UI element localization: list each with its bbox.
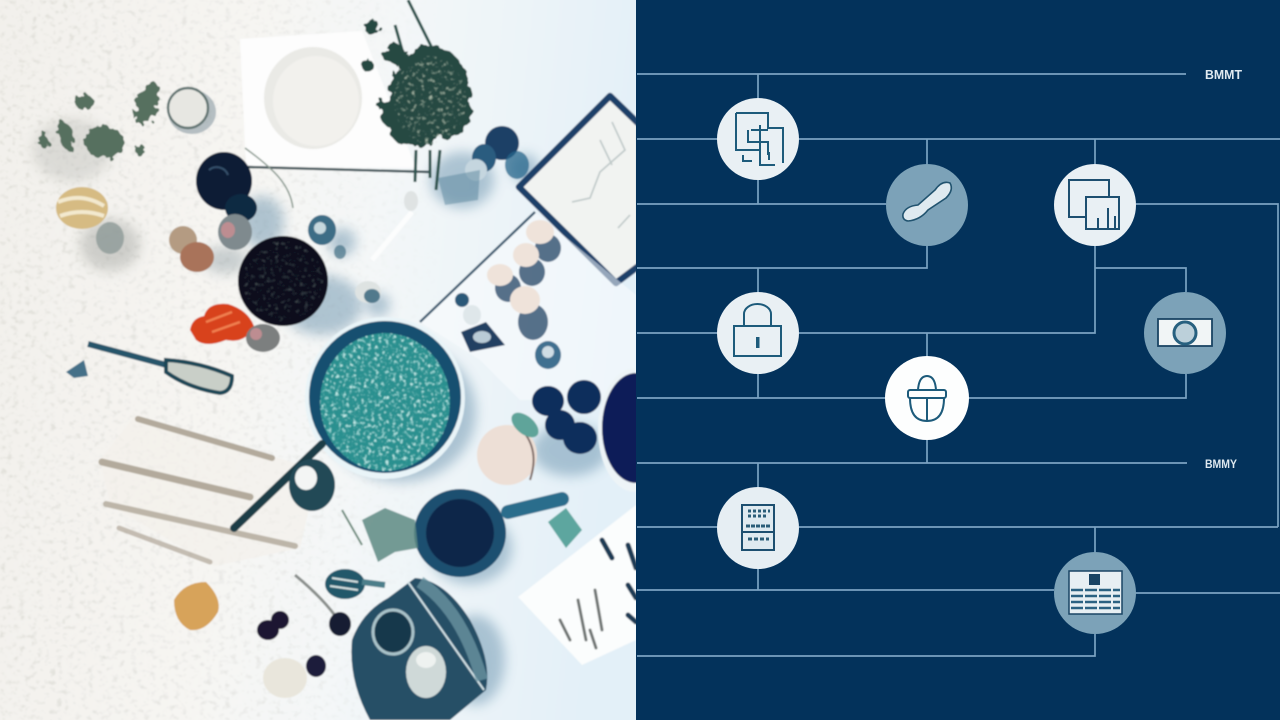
white card with dark marks [518, 505, 636, 665]
dark bottle [196, 148, 293, 222]
tan shell [56, 187, 124, 254]
ring and crushed herbs [32, 79, 216, 182]
teal handled tool [66, 344, 232, 393]
dark knife and gear [234, 444, 335, 528]
paper sheet and cupcakes [420, 212, 636, 400]
glass tin with shell [351, 578, 487, 720]
measuring spoon [381, 191, 418, 250]
red coral piece [190, 304, 280, 352]
panel: tabletop photo [0, 0, 672, 720]
navy bowl [598, 372, 636, 492]
baking tray [519, 96, 640, 283]
object shadows [80, 152, 608, 705]
icon: floor plan [717, 98, 799, 180]
connector lines [637, 74, 1280, 656]
icon: acorn [885, 356, 969, 440]
panel: navy network diagram [636, 0, 1280, 720]
black bowl [238, 236, 328, 326]
icon: ID card [1054, 552, 1136, 634]
label: top right: BMMT [1205, 67, 1242, 82]
icon: padlock [717, 292, 799, 374]
teal bowl of beads [305, 317, 465, 479]
icon: overlapping squares [1054, 164, 1136, 246]
white plate with powder [240, 31, 430, 172]
sage leaves [342, 508, 418, 562]
whisk and dark berries [257, 569, 385, 698]
label: lower right: BMMY [1205, 457, 1237, 471]
herb bunch [362, 0, 470, 190]
dark blue mortar [414, 489, 582, 577]
wooden sticks [102, 419, 295, 562]
blue berries near herbs [438, 126, 529, 205]
icon: document [717, 487, 799, 569]
parchment sheet [100, 415, 318, 566]
small spice jars [169, 214, 381, 303]
small stacked figures [455, 293, 561, 369]
icon: spoon [886, 164, 968, 246]
cauliflower and blue berries [477, 380, 601, 485]
amber stone [174, 582, 219, 630]
icon: camera [1144, 292, 1226, 374]
